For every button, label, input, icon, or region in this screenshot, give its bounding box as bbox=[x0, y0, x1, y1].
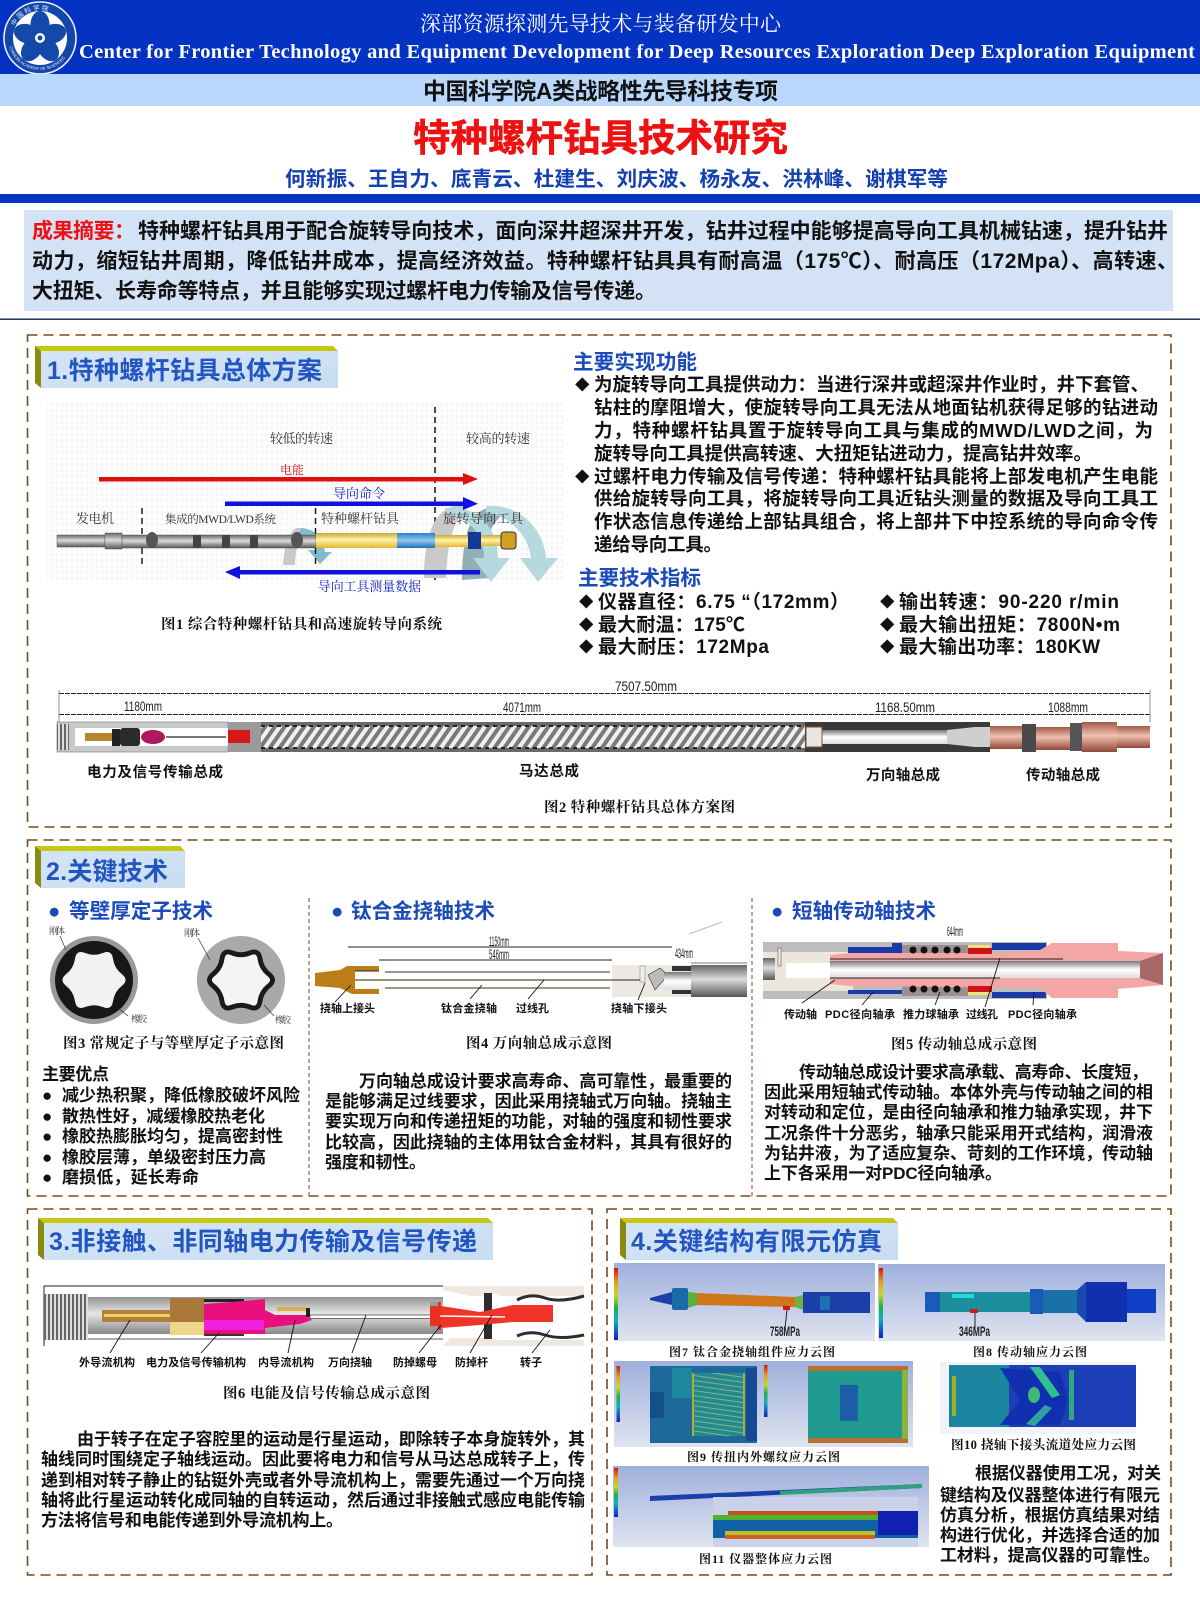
figure 8: transmission shaft stress: 346MPa bbox=[959, 1323, 990, 1339]
figure 3: stator sections: 刚体 bbox=[184, 927, 200, 938]
transmission shaft description: 因此采用短轴式传动轴。本体外壳与传动轴之间的相 bbox=[764, 1082, 1153, 1102]
main functions text: ◆ bbox=[575, 469, 590, 486]
figure 11: whole tool stress bbox=[613, 1466, 929, 1547]
column: titanium flex shaft: 钛合金挠轴技术 bbox=[351, 899, 495, 923]
transmission shaft description: 工况条件十分恶劣，轴承只能采用开式结构，润滑液 bbox=[764, 1123, 1153, 1143]
advantages list: ● bbox=[42, 1127, 52, 1146]
advantages list: 减少热积聚，降低橡胶破坏风险 bbox=[62, 1085, 300, 1105]
abstract box: 大扭矩、长寿命等特点，并且能够实现过螺杆电力传输及信号传递。 bbox=[32, 279, 656, 303]
figure 4: universal shaft drawing: 434mm bbox=[675, 945, 693, 961]
panel 1: overall scheme bbox=[28, 335, 1171, 827]
figure 7: titanium shaft stress: 758MPa bbox=[770, 1323, 800, 1339]
dimension lines: 1088mm bbox=[1048, 699, 1088, 715]
figure 6: power and signal assembly drawing bbox=[44, 1286, 584, 1369]
leader lines and labels: 挠轴上接头 bbox=[320, 1001, 375, 1015]
planetary motion description bbox=[41, 1429, 585, 1530]
figure 1: drilling system diagram bbox=[47, 403, 563, 633]
tool body bbox=[57, 722, 1150, 752]
program band bbox=[0, 74, 1200, 106]
steering command arrow bbox=[225, 483, 478, 510]
blue divider bar bbox=[0, 194, 1200, 203]
technical specifications: 输出转速：90-220 r/min bbox=[899, 590, 1119, 613]
panel 2: key technologies bbox=[28, 840, 1171, 1196]
technical specifications: ◆ bbox=[579, 639, 594, 656]
planetary motion description: 递到相对转子静止的钻铤外壳或者外导流机构上，需要先通过一个万向挠 bbox=[41, 1470, 585, 1490]
caption figure 10: 图10 挠轴下接头流道处应力云图 bbox=[951, 1437, 1136, 1453]
heading 1: 1.特种螺杆钻具总体方案 bbox=[47, 356, 322, 385]
simulation description bbox=[940, 1464, 1161, 1565]
advantages list: ● bbox=[42, 1086, 52, 1105]
header band bbox=[0, 0, 1200, 74]
technical specifications: 主要技术指标 bbox=[578, 567, 701, 590]
figure 10: lower joint flow channel stress bbox=[940, 1362, 1136, 1434]
figure 5: transmission shaft drawing bbox=[763, 923, 1163, 1021]
figure 1: drilling system diagram: 较低的转速 bbox=[270, 431, 333, 446]
header Chinese organisation name: 深部资源探测先导技术与装备研发中心 bbox=[420, 12, 782, 36]
technical specifications: 最大输出扭矩：7800N•m bbox=[899, 613, 1120, 636]
column: titanium flex shaft: ● bbox=[331, 900, 343, 923]
figure 4: universal shaft drawing: 1150mm bbox=[489, 933, 509, 949]
column: titanium flex shaft bbox=[315, 899, 747, 1172]
transmission shaft description: 上下各采用一对PDC径向轴承。 bbox=[764, 1163, 1002, 1183]
planetary motion description: 轴将此行星运动转化成同轴的自转运动，然后通过非接触式感应电能传输 bbox=[41, 1490, 585, 1510]
figure 1: drilling system diagram: 集成的MWD/LWD系统 bbox=[165, 512, 276, 526]
abstract box: 特种螺杆钻具用于配合旋转导向技术，面向深井超深井开发，钻井过程中能够提高导向工具机械钻速，提升钻井 bbox=[138, 219, 1168, 243]
figure 9: thread stress bbox=[614, 1361, 913, 1447]
technical specifications: 最大输出功率：180KW bbox=[899, 635, 1100, 658]
column: short transmission shaft: 短轴传动轴技术 bbox=[792, 900, 936, 923]
authors: 何新振、王自力、底青云、杜建生、刘庆波、杨永友、洪林峰、谢棋军等 bbox=[285, 167, 948, 191]
abstract box bbox=[24, 210, 1178, 311]
figure 8: transmission shaft stress bbox=[878, 1264, 1165, 1341]
technical specifications: ◆ bbox=[880, 639, 895, 656]
simulation description: 根据仪器使用工况，对关 bbox=[975, 1464, 1161, 1483]
logo: Chinese Academy of Sciences emblem: 中 国 科 学 院 bbox=[11, 4, 48, 25]
advantages list: 磨损低，延长寿命 bbox=[62, 1167, 199, 1187]
main functions text: ◆ bbox=[575, 377, 590, 394]
advantages list: 散热性好，减缓橡胶热老化 bbox=[62, 1106, 265, 1126]
curved rotation arrows bbox=[283, 505, 558, 582]
leader lines and labels: 挠轴下接头 bbox=[611, 1001, 667, 1015]
figure 3: stator sections: 橡胶 bbox=[131, 1013, 148, 1024]
dimension lines: 7507.50mm bbox=[615, 678, 677, 694]
technical specifications: ◆ bbox=[579, 594, 594, 611]
leader lines and labels: 万向挠轴 bbox=[328, 1355, 372, 1369]
figure 2: overall tool drawing: 万向轴总成 bbox=[866, 766, 940, 784]
main functions text: 供给旋转导向工具，将旋转导向工具近钻头测量的数据及导向工具工 bbox=[594, 488, 1158, 509]
steering command arrow: 导向命令 bbox=[333, 483, 385, 502]
main functions text: 递给导向工具。 bbox=[594, 534, 722, 555]
figure 3: stator sections: 刚体 bbox=[49, 925, 65, 936]
leader lines and labels bbox=[79, 1315, 550, 1369]
heading 2: 2.关键技术 bbox=[46, 858, 168, 886]
leader lines and labels: PDC径向轴承 bbox=[1008, 1007, 1077, 1021]
technical specifications: ◆ bbox=[880, 617, 895, 634]
leader lines and labels: 防掉螺母 bbox=[393, 1355, 437, 1369]
leader lines and labels: 推力球轴承 bbox=[903, 1007, 959, 1021]
leader lines and labels: 防掉杆 bbox=[455, 1355, 488, 1369]
caption figure 8: 图8 传动轴应力云图 bbox=[973, 1344, 1087, 1359]
technical specifications: 最大耐温：175℃ bbox=[598, 614, 745, 636]
abstract box: 成果摘要： bbox=[32, 219, 135, 243]
heading 4: 4.关键结构有限元仿真 bbox=[631, 1228, 882, 1256]
universal shaft description: 强度和韧性。 bbox=[325, 1153, 426, 1172]
leader lines and labels: 电力及信号传输机构 bbox=[146, 1355, 246, 1369]
leader lines and labels: 传动轴 bbox=[784, 1007, 817, 1021]
caption figure 4: 图4 万向轴总成示意图 bbox=[466, 1034, 612, 1052]
measured data arrow bbox=[225, 566, 480, 595]
energy arrow: 电能 bbox=[280, 461, 304, 478]
dimension lines: 4071mm bbox=[503, 699, 541, 715]
advantages list: ● bbox=[42, 1168, 52, 1187]
abstract box: 动力，缩短钻井周期，降低钻井成本，提高经济效益。特种螺杆钻具具有耐高温（175℃）、耐高压（172Mpa）、高转速、 bbox=[32, 249, 1178, 273]
planetary motion description: 由于转子在定子容腔里的运动是行星运动，即除转子本身旋转外，其 bbox=[77, 1429, 585, 1449]
transmission shaft description: 为钻井液，为了适应复杂、苛刻的工作环境，传动轴 bbox=[764, 1143, 1153, 1163]
main functions text: 旋转导向工具提供高转速、大扭矩钻进动力，提高钻井效率。 bbox=[594, 443, 1092, 464]
caption figure 3: 图3 常规定子与等壁厚定子示意图 bbox=[63, 1034, 284, 1052]
column: equal wall stator bbox=[42, 899, 300, 1187]
column: equal wall stator: ● bbox=[48, 900, 60, 923]
simulation description: 工材料，提高仪器的可靠性。 bbox=[940, 1545, 1160, 1565]
figure 2: overall tool drawing: 电力及信号传输总成 bbox=[87, 763, 224, 781]
caption figure 6: 图6 电能及信号传输总成示意图 bbox=[223, 1384, 430, 1402]
caption figure 2: 图2 特种螺杆钻具总体方案图 bbox=[544, 798, 735, 816]
universal shaft description: 比较高，因此挠轴的主体用钛合金材料，其具有很好的 bbox=[325, 1132, 732, 1152]
logo: Chinese Academy of Sciences emblem: CHINESE ACADEMY OF SCIENCES bbox=[10, 46, 65, 70]
figure 1: drilling system diagram: 发电机 bbox=[76, 511, 114, 526]
title: 特种螺杆钻具技术研究 bbox=[413, 117, 788, 159]
logo: Chinese Academy of Sciences emblem bbox=[3, 1, 77, 74]
main functions text: 过螺杆电力传输及信号传递：特种螺杆钻具能将上部发电机产生电能 bbox=[594, 466, 1158, 487]
panel 3: non-contact power and signal transmission bbox=[28, 1209, 592, 1575]
leader lines and labels: 钛合金挠轴 bbox=[441, 1001, 497, 1015]
leader lines and labels: 过线孔 bbox=[966, 1007, 998, 1021]
universal shaft description bbox=[325, 1071, 732, 1172]
heading 1 bbox=[35, 346, 338, 388]
leader lines and labels bbox=[320, 980, 667, 1015]
figure 1: drilling system diagram: 较高的转速 bbox=[466, 431, 530, 446]
main functions text bbox=[573, 350, 1158, 555]
transmission shaft description bbox=[764, 1062, 1153, 1183]
dimension lines: 1180mm bbox=[124, 698, 162, 714]
advantages list: ● bbox=[42, 1148, 52, 1167]
main functions text: 力，特种螺杆钻具置于旋转导向工具与集成的MWD/LWD之间，为 bbox=[594, 420, 1153, 441]
heading 4 bbox=[620, 1218, 898, 1260]
drill string bbox=[57, 532, 516, 549]
caption figure 1: 图1 综合特种螺杆钻具和高速旋转导向系统 bbox=[161, 615, 444, 633]
panel 4: finite element simulation bbox=[607, 1209, 1171, 1575]
header English organisation name: Center for Frontier Technology and Equipment Development for Deep Resources Exploration Deep Exploration Equipment bbox=[79, 41, 1195, 63]
universal shaft description: 要实现万向和传递扭矩的功能，对轴的强度和韧性要求 bbox=[325, 1111, 732, 1131]
figure 5: transmission shaft drawing: 644mm bbox=[947, 923, 963, 939]
advantages list: 橡胶热膨胀均匀，提高密封性 bbox=[62, 1126, 283, 1146]
technical specifications: 最大耐压：172Mpa bbox=[598, 636, 769, 658]
column: short transmission shaft: ● bbox=[771, 900, 783, 923]
planetary motion description: 方法将信号和电能传递到外导流机构上。 bbox=[41, 1510, 343, 1530]
advantages list bbox=[42, 1065, 300, 1187]
simulation description: 键结构及仪器整体进行有限元 bbox=[940, 1485, 1160, 1505]
main functions text: 为旋转导向工具提供动力：当进行深井或超深井作业时，井下套管、 bbox=[594, 374, 1149, 395]
universal shaft description: 是能够满足过线要求，因此采用挠轴式万向轴。挠轴主 bbox=[325, 1092, 732, 1111]
technical specifications: 仪器直径：6.75 “（172mm） bbox=[598, 591, 849, 613]
advantages list: 主要优点 bbox=[42, 1065, 109, 1084]
advantages list: 橡胶层薄，单级密封压力高 bbox=[62, 1147, 266, 1167]
figure 2: overall tool drawing: 传动轴总成 bbox=[1026, 766, 1100, 784]
dimension lines: 1168.50mm bbox=[875, 699, 935, 715]
universal shaft description: 万向轴总成设计要求高寿命、高可靠性，最重要的 bbox=[359, 1071, 732, 1091]
technical specifications: ◆ bbox=[579, 617, 594, 634]
leader lines and labels bbox=[784, 958, 1077, 1021]
leader lines and labels: PDC径向轴承 bbox=[825, 1007, 895, 1021]
planetary motion description: 轴线同时围绕定子轴线运动。因此要将电力和信号从马达总成转子上，传 bbox=[41, 1449, 585, 1469]
caption figure 7: 图7 钛合金挠轴组件应力云图 bbox=[669, 1344, 835, 1359]
figure 2: overall tool drawing bbox=[57, 678, 1150, 816]
transmission shaft description: 对转动和定位，是由径向轴承和推力轴承实现，井下 bbox=[764, 1102, 1153, 1122]
main functions text: 钻柱的摩阻增大，使旋转导向工具无法从地面钻机获得足够的钻进动 bbox=[594, 397, 1158, 418]
heading 2 bbox=[35, 846, 185, 888]
simulation description: 构进行优化，并选择合适的加 bbox=[940, 1525, 1160, 1545]
transmission shaft description: 传动轴总成设计要求高承载、高寿命、长度短， bbox=[799, 1062, 1148, 1082]
figure 4: universal shaft drawing: 546mm bbox=[489, 946, 509, 962]
measured data arrow: 导向工具测量数据 bbox=[318, 576, 421, 595]
technical specifications bbox=[578, 567, 1120, 658]
main functions text: 主要实现功能 bbox=[573, 350, 697, 374]
figure 1: drilling system diagram: 旋转导向工具 bbox=[443, 511, 524, 526]
figure 1: drilling system diagram: 特种螺杆钻具 bbox=[321, 511, 400, 526]
simulation description: 仿真分析，根据仿真结果对结 bbox=[940, 1505, 1160, 1525]
technical specifications: ◆ bbox=[880, 594, 895, 611]
figure 7: titanium shaft stress bbox=[614, 1263, 875, 1341]
caption figure 5: 图5 传动轴总成示意图 bbox=[891, 1035, 1037, 1053]
figure 4: universal shaft drawing bbox=[315, 922, 747, 1015]
energy arrow bbox=[99, 461, 478, 485]
caption figure 9: 图9 传扭内外螺纹应力云图 bbox=[687, 1449, 840, 1464]
advantages list: ● bbox=[42, 1107, 52, 1126]
main functions text: 作状态信息传递给上部钻具组合，将上部井下中控系统的导向命令传 bbox=[594, 511, 1158, 532]
figure 3: stator sections: 橡胶 bbox=[275, 1014, 292, 1025]
heading 3 bbox=[38, 1218, 493, 1260]
figure 2: overall tool drawing: 马达总成 bbox=[519, 762, 580, 780]
leader lines and labels: 内导流机构 bbox=[258, 1355, 314, 1369]
dimension lines bbox=[59, 678, 1150, 722]
leader lines and labels: 过线孔 bbox=[516, 1001, 549, 1015]
heading 3: 3.非接触、非同轴电力传输及信号传递 bbox=[49, 1228, 477, 1256]
leader lines and labels: 转子 bbox=[520, 1355, 542, 1369]
caption figure 11: 图11 仪器整体应力云图 bbox=[699, 1551, 832, 1566]
leader lines and labels: 外导流机构 bbox=[79, 1355, 135, 1369]
column: equal wall stator: 等壁厚定子技术 bbox=[69, 899, 213, 923]
figure 3: stator sections bbox=[49, 925, 292, 1025]
program band: 中国科学院A类战略性先导科技专项 bbox=[423, 78, 778, 104]
column: short transmission shaft bbox=[763, 900, 1163, 1183]
